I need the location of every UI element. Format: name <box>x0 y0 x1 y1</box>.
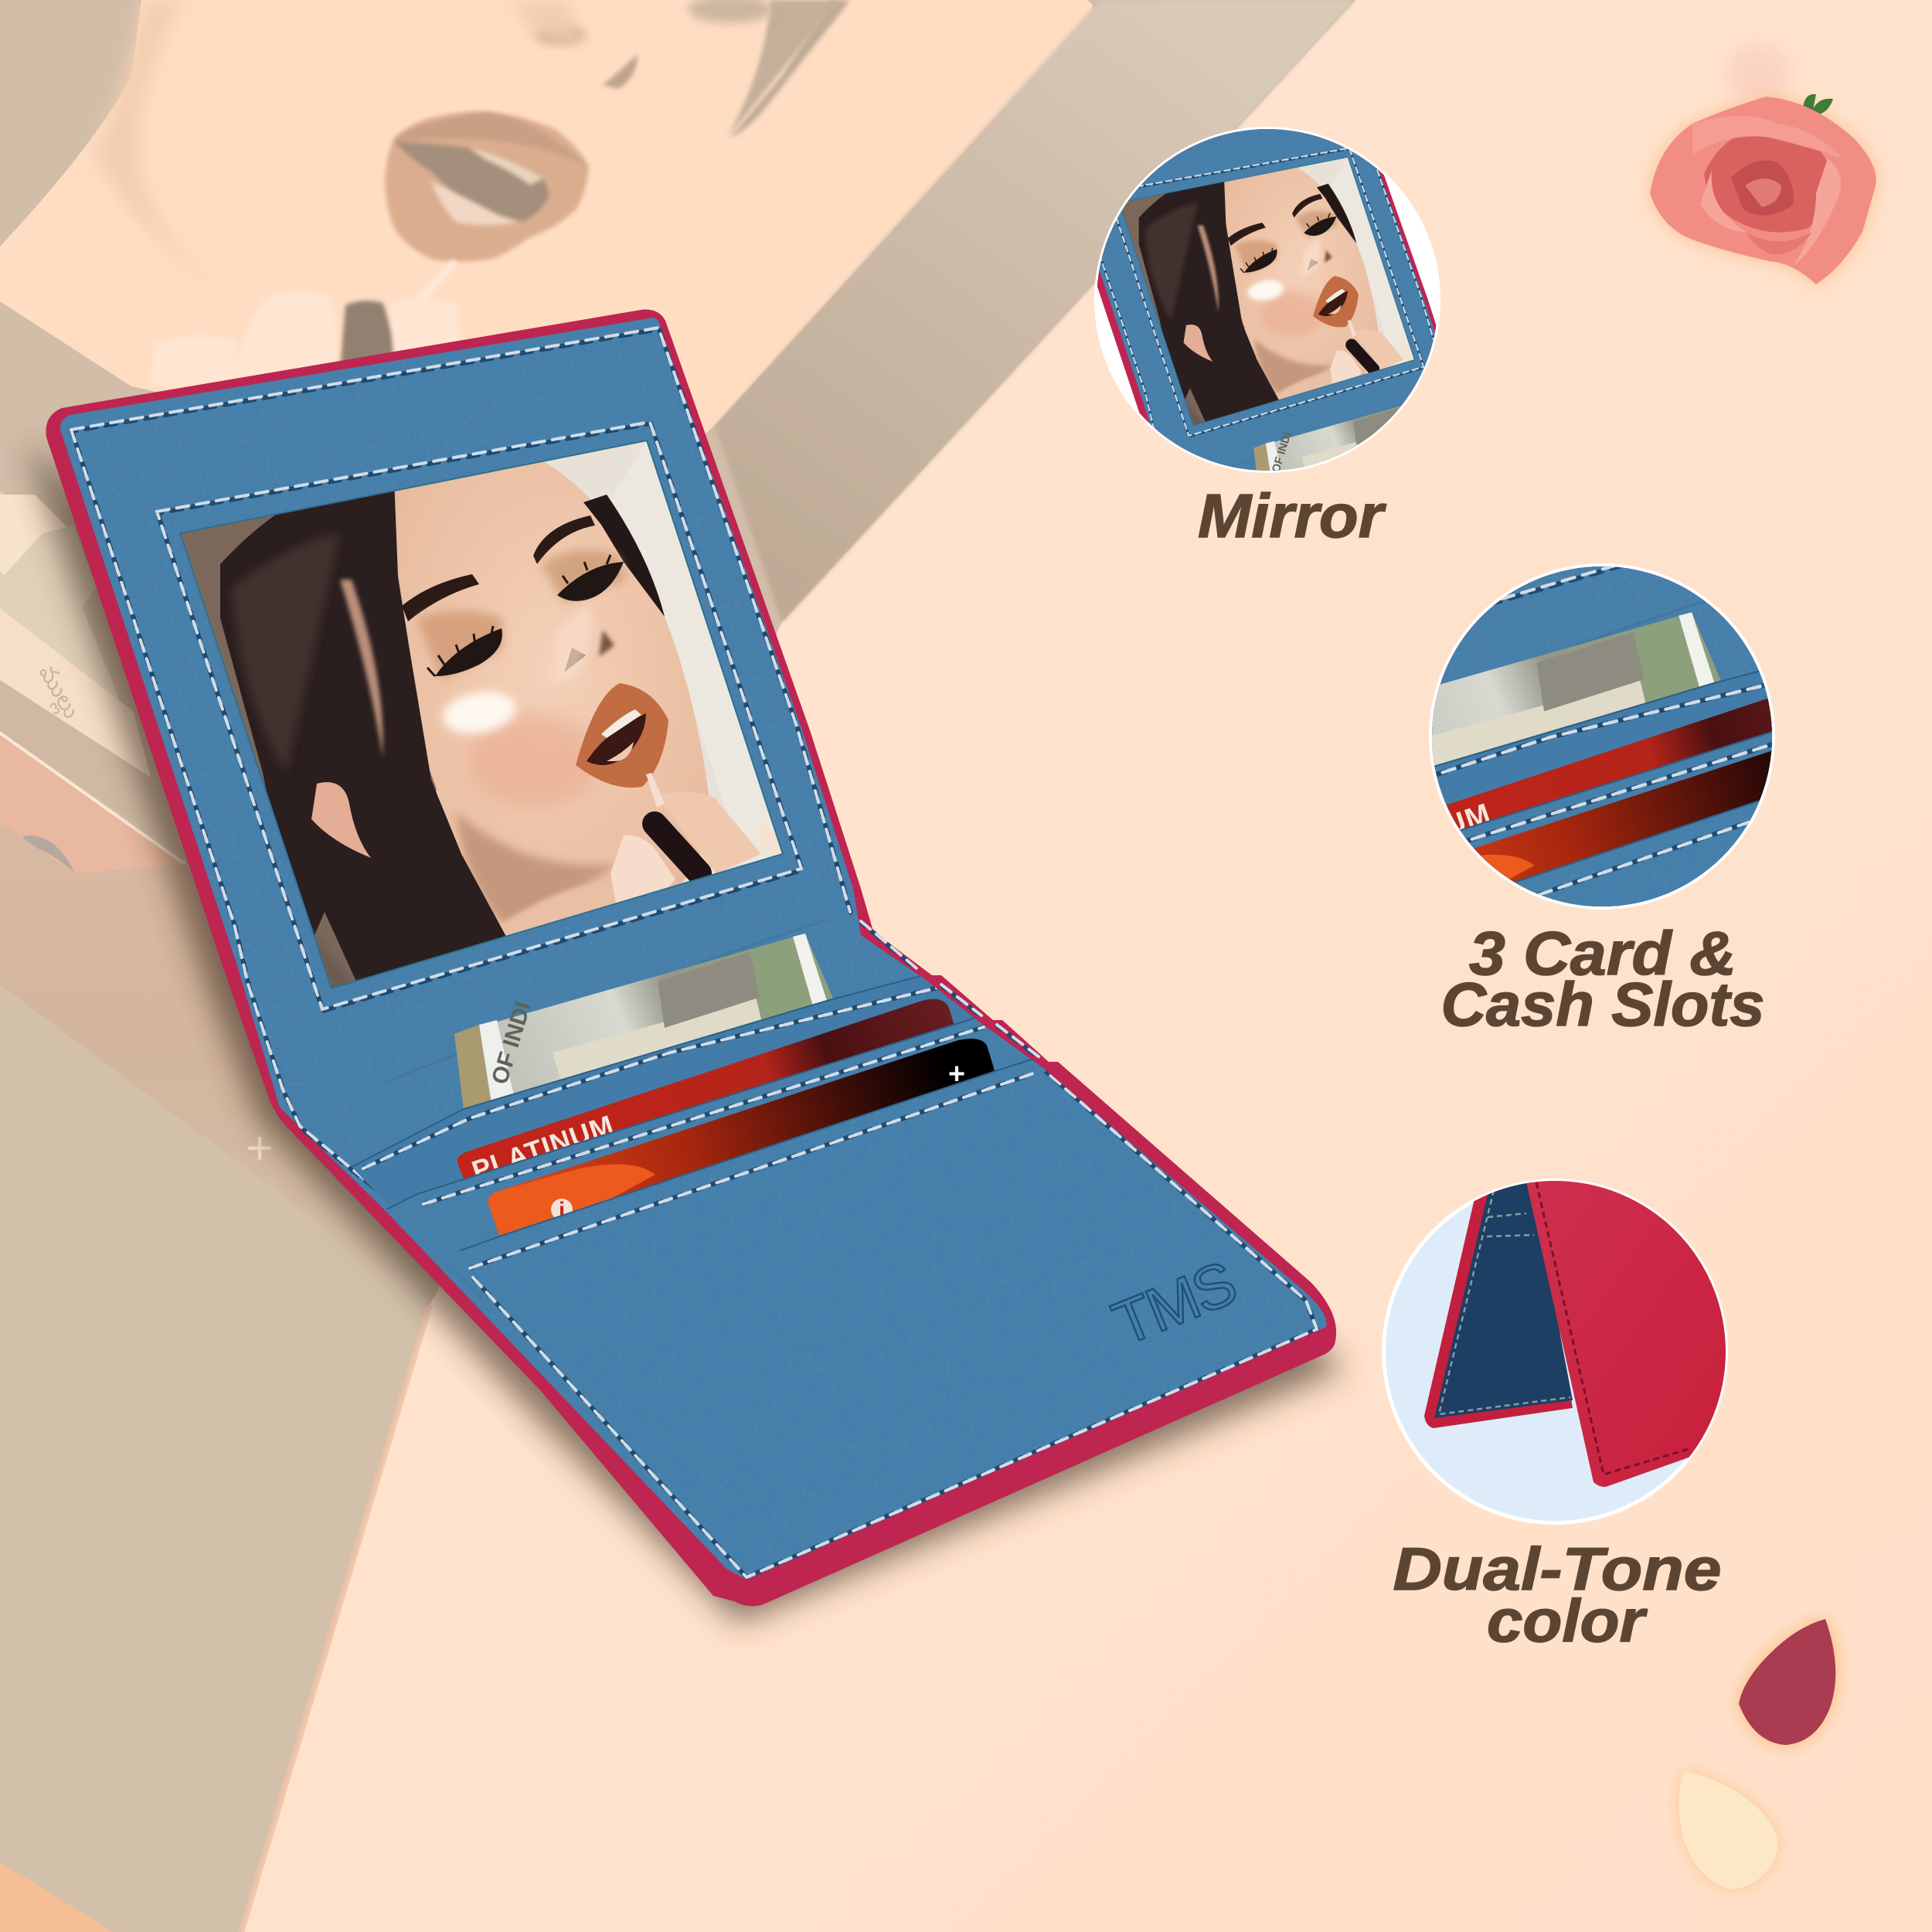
ghost: stitch plus mark: + <box>246 1122 274 1174</box>
mirror inner edge <box>180 440 783 988</box>
card two: black and orange: i <box>559 1198 565 1223</box>
panel: mirror callout <box>1053 93 1685 728</box>
panel: card and cash slots callout <box>894 0 1932 1318</box>
front pocket <box>461 1056 1326 1580</box>
pocket two <box>386 1012 1039 1306</box>
slots label: 3 Card & <box>1469 919 1736 988</box>
ghost: wallet body <box>0 0 1355 1932</box>
card one: platinum: PLATINUM <box>468 1109 617 1187</box>
decoration: red makeup sponge <box>1739 1619 1835 1745</box>
ghost: banknote: ముల్లు <box>31 661 84 725</box>
card two: black and orange <box>488 1039 997 1256</box>
ghost: lower panel <box>0 985 430 1932</box>
ghosted background photo of the wallet <box>0 0 1355 1932</box>
rose petals <box>1650 97 1876 284</box>
ghost: red card <box>0 680 430 1305</box>
panel: dual-tone callout: color <box>1487 1587 1648 1655</box>
photo: face <box>386 456 710 993</box>
dual-tone circle <box>1382 1159 1747 1525</box>
dual-tone label: Dual-Tone <box>1393 1535 1722 1603</box>
wallet outer red flap <box>1525 1159 1747 1487</box>
debossed brand logo: TMS <box>1104 1248 1244 1359</box>
ghost: orange corner <box>0 1862 114 1932</box>
banknote legend: OF INDI <box>487 998 536 1087</box>
wallet inner navy panel <box>1424 1179 1573 1428</box>
photo: eyebrows <box>402 574 479 621</box>
mirror photo of woman applying lipstick <box>155 425 811 1012</box>
photo: ear <box>311 782 371 858</box>
card one: platinum <box>457 999 958 1198</box>
photo: hair <box>220 479 526 997</box>
photo: cheek highlight <box>439 686 519 739</box>
wallet: outer stitching <box>71 328 1040 1279</box>
ghost: banknote <box>0 492 151 777</box>
photo: eyes <box>417 611 502 680</box>
banknote in cash slot <box>454 934 842 1144</box>
wallet: blue lining <box>60 318 1326 1580</box>
wallet shadow <box>27 444 1345 1623</box>
mirror label: Mirror <box>1198 481 1386 550</box>
ghost: right band shading <box>715 0 1355 622</box>
ghost: hand and lipstick <box>151 259 460 386</box>
slots circle <box>894 0 1932 1318</box>
wallet: mirror frame stitching <box>157 422 802 1011</box>
wallet: red outer edge <box>46 310 1336 1606</box>
ghost: lips <box>385 111 589 261</box>
pocket one <box>352 972 1036 1298</box>
card pockets stack <box>352 972 1326 1580</box>
panel: card and cash slots callout: Cash Slots <box>1440 970 1765 1039</box>
mirror circle <box>1053 93 1685 728</box>
photo: nose <box>564 648 586 672</box>
main wallet <box>27 310 1345 1623</box>
wallet: fold creases <box>386 920 827 1082</box>
panel: dual-tone callout <box>1382 1159 1747 1655</box>
photo: hand and lipstick <box>611 835 675 908</box>
card plus sign: + <box>948 1058 965 1090</box>
ghost: enlarged mirror face <box>0 0 1093 495</box>
photo: lips <box>576 683 668 787</box>
decoration: beige makeup sponge <box>1679 1771 1778 1889</box>
rose leaves <box>1803 94 1833 116</box>
decoration: rose <box>1650 44 1876 284</box>
